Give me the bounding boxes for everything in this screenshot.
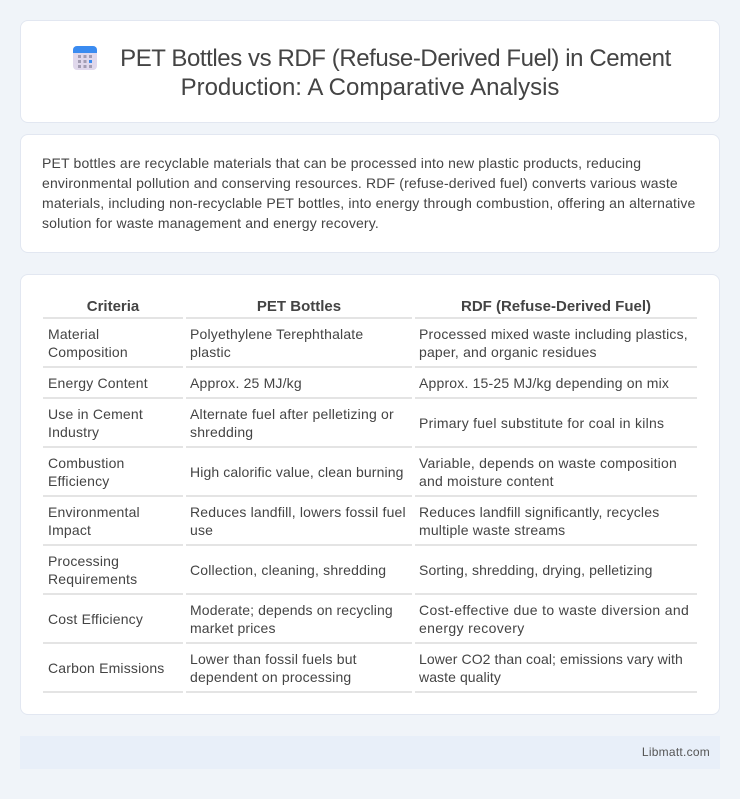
cell: RDF environment: multiple waste streams	[419, 522, 565, 538]
title	[120, 45, 672, 101]
cell: RDF combustion: and moisture content	[419, 473, 554, 489]
cell: RDF environment	[419, 504, 659, 538]
table header: PET bottles: PET Bottles	[257, 298, 341, 315]
row: processing requirements	[48, 553, 137, 587]
cell: PET cost	[190, 602, 393, 636]
cell: RDF processing: Sorting, shredding, drying, pelletizing	[419, 562, 652, 578]
cell: PET combustion: High calorific value, clean burning	[190, 464, 404, 480]
intro text: solution for waste management and energy recovery.	[42, 215, 379, 231]
row: processing requirements: Requirements	[48, 571, 137, 587]
cell: RDF use: Primary fuel substitute for coal in kilns	[419, 415, 664, 431]
row: environmental impact: Impact	[48, 522, 91, 538]
cell: RDF combustion	[419, 455, 677, 489]
cell: RDF cost: energy recovery	[419, 620, 525, 636]
intro text: environmental pollution and conserving resources. RDF (refuse-derived fuel) converts various waste	[42, 175, 678, 191]
title: Production: A Comparative Analysis	[181, 74, 559, 101]
cell: PET environment: Reduces landfill, lowers fossil fuel	[190, 504, 406, 520]
cell: PET cost: market prices	[190, 620, 276, 636]
cell: PET environment: use	[190, 522, 213, 538]
cell: PET carbon: dependent on processing	[190, 669, 351, 685]
panel: introduction	[20, 134, 720, 253]
row: carbon emissions: Carbon Emissions	[48, 660, 164, 676]
cell: RDF material: Processed mixed waste including plastics,	[419, 326, 688, 342]
intro text	[42, 155, 695, 231]
cell: RDF carbon: waste quality	[419, 669, 501, 685]
table header: criteria: Criteria	[87, 298, 139, 315]
cell: PET use: shredding	[190, 424, 253, 440]
table header: RDF: RDF (Refuse-Derived Fuel)	[461, 298, 651, 315]
icon: calendar	[73, 46, 97, 70]
intro text: materials, including non-recyclable PET bottles, into energy through combustion, offering an alternative	[42, 195, 695, 211]
cell: PET carbon: Lower than fossil fuels but	[190, 651, 357, 667]
footer credit: Libmatt.com	[642, 745, 710, 759]
row: material composition	[48, 326, 128, 360]
panel: comparison table	[20, 274, 720, 715]
cell: RDF environment: Reduces landfill significantly, recycles	[419, 504, 659, 520]
row: energy content: Energy Content	[48, 375, 148, 391]
cell: RDF combustion: Variable, depends on waste composition	[419, 455, 677, 471]
row: environmental impact: Environmental	[48, 504, 140, 520]
cell: RDF carbon: Lower CO2 than coal; emissions vary with	[419, 651, 683, 667]
footer bar	[20, 736, 720, 769]
row: combustion efficiency	[48, 455, 125, 489]
cell: RDF cost: Cost-effective due to waste diversion and	[419, 602, 689, 618]
cell: PET environment	[190, 504, 406, 538]
row: material composition: Material	[48, 326, 99, 342]
panel: header	[20, 20, 720, 123]
cell: RDF material: paper, and organic residues	[419, 344, 597, 360]
cell: PET cost: Moderate; depends on recycling	[190, 602, 393, 618]
row: cost efficiency: Cost Efficiency	[48, 611, 143, 627]
cell: PET processing: Collection, cleaning, shredding	[190, 562, 386, 578]
intro text: PET bottles are recyclable materials that can be processed into new plastic products, reducing	[42, 155, 641, 171]
cell: PET material: Polyethylene Terephthalate	[190, 326, 363, 342]
row: use in cement industry	[48, 406, 143, 440]
cell: PET material: plastic	[190, 344, 231, 360]
cell: PET use: Alternate fuel after pelletizing or	[190, 406, 394, 422]
row: processing requirements: Processing	[48, 553, 119, 569]
row: combustion efficiency: Efficiency	[48, 473, 109, 489]
cell: RDF carbon	[419, 651, 683, 685]
row: use in cement industry: Use in Cement	[48, 406, 143, 422]
cell: PET energy: Approx. 25 MJ/kg	[190, 375, 302, 391]
row: environmental impact	[48, 504, 140, 538]
cell: RDF cost	[419, 602, 689, 636]
row: material composition: Composition	[48, 344, 128, 360]
cell: PET material	[190, 326, 363, 360]
row: use in cement industry: Industry	[48, 424, 99, 440]
cell: RDF material	[419, 326, 688, 360]
title: PET Bottles vs RDF (Refuse-Derived Fuel) in Cement	[120, 45, 671, 72]
row: combustion efficiency: Combustion	[48, 455, 125, 471]
cell: PET carbon	[190, 651, 357, 685]
cell: RDF energy: Approx. 15-25 MJ/kg depending on mix	[419, 375, 669, 391]
cell: PET use	[190, 406, 394, 440]
